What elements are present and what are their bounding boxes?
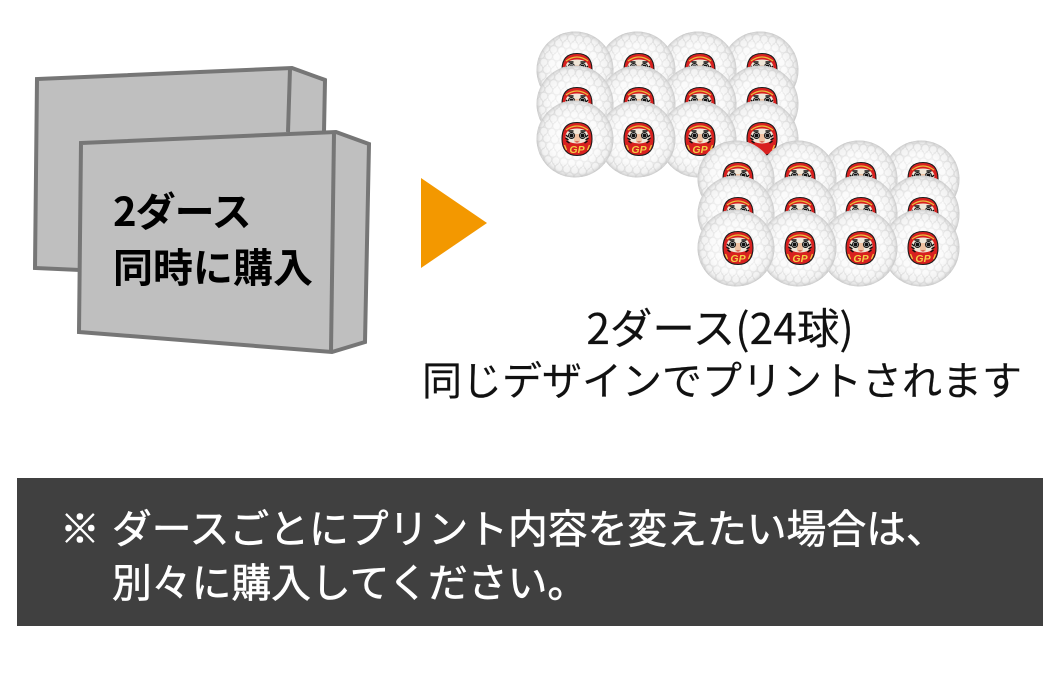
box: front package with label [79, 132, 369, 352]
golf balls: second dozen [698, 140, 960, 286]
golf balls: second dozen: GP [915, 253, 932, 265]
golf balls: first dozen: GP [692, 144, 709, 156]
arrow: orange triangle [421, 178, 487, 268]
box label: 2ダース同時に購入: 同時に購入 [113, 236, 313, 294]
notice text: 別々に購入してください。 [112, 552, 587, 609]
box: back package [34, 67, 326, 270]
notice text: ダースごとにプリント内容を変えたい場合は、 [112, 498, 946, 555]
golf balls: first dozen [536, 32, 798, 178]
caption: 2 dozen printed with the same design: 2ダース(24球) [586, 296, 854, 357]
box label: 2ダース同時に購入: 2ダース [113, 180, 251, 238]
notice text: ※ [60, 498, 100, 555]
caption: 2 dozen printed with the same design: 同じデザインでプリントされます [422, 349, 1022, 407]
golf balls: second dozen: GP [730, 253, 747, 265]
golf balls: first dozen: GP [631, 144, 648, 156]
golf balls: first dozen: GP [569, 144, 586, 156]
golf balls: second dozen: GP [853, 253, 870, 265]
golf balls: second dozen: GP [792, 253, 809, 265]
notice bar [17, 478, 1043, 626]
